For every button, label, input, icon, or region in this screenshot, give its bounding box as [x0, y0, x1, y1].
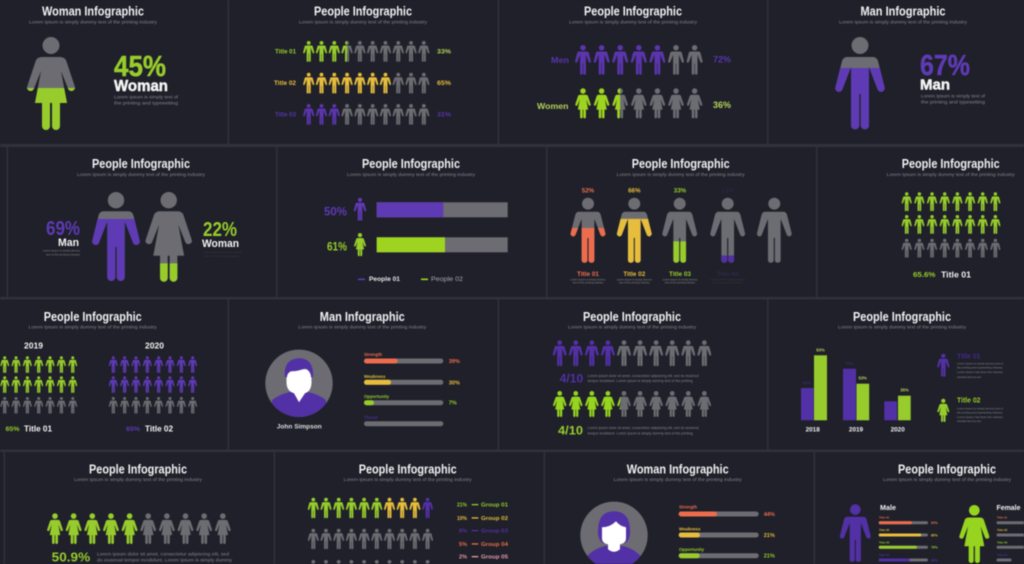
icon: man [937, 354, 949, 377]
skill labels: Weakness [679, 526, 701, 532]
male bars: 63% [931, 558, 938, 562]
panel: male female [840, 462, 1024, 563]
panel: woman profile [580, 462, 775, 564]
skill bars [364, 358, 443, 426]
skill labels: Opportunity [679, 547, 705, 552]
skill labels: Weakness [364, 374, 386, 379]
title: People Infographic [584, 4, 682, 18]
title: People Infographic [362, 157, 460, 171]
bar: people 02 [377, 237, 508, 252]
figure green [662, 198, 697, 263]
text 02 [957, 406, 1003, 423]
bar chart: 53% [859, 376, 867, 380]
subtitle: Lorem Ipsum is simply dummy text of the printing industry [29, 20, 158, 24]
bar chart: 93% [816, 348, 825, 352]
description: Lorem Ipsum is simply text of [921, 94, 986, 98]
title: People Infographic [89, 462, 187, 476]
people row 3 [303, 104, 429, 125]
icon: large woman [27, 37, 75, 130]
woman stat: Woman [202, 238, 239, 250]
subtitle: Lorem Ipsum is simply dummy text of the printing industry [568, 324, 697, 330]
subtitle: Lorem Ipsum is simply dummy text of the printing industry [839, 20, 968, 24]
percentages: 31% [437, 112, 452, 118]
text 01: the printing and typesetting industry. [957, 366, 1003, 370]
panel: 50.9% women [47, 462, 233, 564]
percent labels: 66% [628, 188, 641, 194]
men percentage: 72% [713, 54, 731, 64]
panel: woman infographic 45% [27, 4, 179, 130]
percent labels: 52% [582, 188, 595, 194]
people grid [902, 192, 1000, 258]
figure grey [757, 198, 792, 263]
icon: woman [959, 505, 989, 563]
male bars: 80% [931, 533, 938, 537]
avatar: man [265, 350, 333, 423]
title: People Infographic [853, 310, 951, 324]
captions [570, 278, 746, 284]
year labels [24, 340, 164, 350]
panel: horizontal bars [324, 157, 508, 283]
female bars: Title 03 [997, 540, 1008, 544]
label: Man [920, 76, 950, 94]
skill percents: 39% [449, 359, 460, 365]
percentage: 67% [920, 50, 970, 82]
skill labels: Strength [364, 352, 382, 357]
title 02: Title 02 [957, 396, 980, 404]
man description: text of the printing industry [46, 252, 80, 256]
row labels [274, 50, 297, 118]
panel: man profile [265, 310, 460, 430]
subtitle: Lorem Ipsum is simply dummy text of the printing industry [29, 324, 158, 330]
skill percents: 7% [449, 401, 457, 407]
women row [553, 391, 711, 417]
legend: Group 03 [481, 529, 508, 535]
figure purple [710, 198, 745, 263]
legend: Group 02 [481, 516, 508, 522]
percent labels: 13% [722, 188, 734, 194]
title: People Infographic [359, 462, 457, 476]
title: Man Infographic [860, 4, 946, 18]
stats: Title 01 [24, 424, 53, 434]
grid 2019 [0, 356, 77, 414]
captions: Lorem Ipsum is simply dummy [570, 278, 606, 282]
titles: Title 02 [623, 271, 646, 278]
captions: text of the printing industry [619, 280, 650, 284]
title: People Infographic [632, 157, 730, 171]
male bars: 76% [931, 546, 938, 550]
captions: text of the printing industry [573, 280, 604, 284]
percentages: 65% [437, 80, 452, 87]
icon: woman [937, 399, 949, 422]
legend: People 01 [369, 276, 400, 283]
captions: Lorem Ipsum is simply dummy [662, 278, 698, 282]
men row [575, 45, 703, 75]
woman description: text of the printing industry [204, 254, 239, 258]
captions: text of the printing industry [712, 280, 744, 284]
skill labels: Threat [364, 415, 378, 420]
panel: three people rows [274, 4, 452, 125]
text green [588, 426, 699, 436]
bar chart: 2019 [849, 426, 864, 434]
stat green: 4/10 [558, 423, 583, 437]
title 01: Title 01 [957, 352, 981, 360]
text 02: Lorem Ipsum has been the industry [957, 415, 1003, 419]
year labels: 2020 [145, 340, 164, 350]
percentage: 45% [114, 51, 166, 83]
panel: man and woman comparison [43, 157, 242, 282]
subtitle: Lorem Ipsum is simply dummy text of the printing industry [344, 477, 473, 482]
icon: large man [835, 37, 885, 129]
subtitle: Lorem Ipsum is simply dummy text of the printing industry [617, 172, 746, 177]
man description [43, 248, 80, 256]
subtitle: Lorem Ipsum is simply dummy text of the printing industry [569, 20, 698, 24]
skill labels [364, 352, 390, 420]
women label: Women [537, 101, 568, 111]
percentages: 33% [437, 48, 452, 56]
title: Woman Infographic [42, 4, 144, 18]
male bars: Title 04 [879, 553, 890, 557]
description [114, 94, 179, 106]
stat label: Title 01 [941, 270, 971, 280]
bar chart: 2020 [891, 426, 905, 434]
people row 1 [308, 498, 433, 518]
figure coral [571, 198, 605, 263]
female bars: Title 01 [997, 515, 1008, 519]
male bars: 64% [931, 521, 938, 525]
captions: Lorem Ipsum is simply dummy [617, 278, 653, 282]
people row 2 [303, 73, 429, 94]
description [921, 94, 986, 104]
skill percents [764, 512, 775, 560]
stat purple: 4/10 [560, 372, 584, 386]
men row [553, 340, 711, 366]
panel: five figures [570, 157, 792, 284]
bar chart [801, 348, 911, 434]
bar chart: 35% [900, 388, 909, 392]
titles [577, 271, 739, 278]
skill percents: 44% [764, 512, 775, 518]
stats: Title 02 [145, 424, 174, 434]
subtitle: Lorem Ipsum is simply dummy text of the printing industry [77, 172, 206, 177]
legend: 21% [457, 503, 467, 509]
people row 1 [303, 41, 429, 62]
icon: man [92, 192, 140, 281]
subtitle: Lorem Ipsum is simply dummy text of the printing industry [838, 324, 967, 330]
skill percents: 21% [764, 533, 775, 539]
percentages [437, 48, 452, 118]
panel: men and women [537, 4, 731, 118]
text 01: Lorem Ipsum has been the industry [957, 370, 1003, 374]
panel: bar chart [801, 310, 1003, 434]
text 01 [957, 362, 1003, 379]
text purple: Lorem ipsum dolor sit amet, consectetur adipiscing elit, sed do eiusmod [588, 374, 699, 378]
people row 2 [308, 529, 433, 549]
title: People Infographic [583, 310, 681, 324]
subtitle: Lorem Ipsum is simply dummy text of the printing industry [883, 477, 1012, 482]
skill bars [679, 512, 759, 558]
bar chart: 50% [803, 380, 811, 386]
title: People Infographic [898, 462, 996, 476]
skill labels: Strength [679, 504, 697, 510]
stats [6, 424, 174, 434]
male bars: Title 01 [879, 515, 890, 519]
panel: 4/10 rows [553, 310, 711, 437]
grid 2020 [109, 356, 197, 414]
legend [358, 276, 463, 283]
title: People Infographic [902, 157, 1000, 171]
panel: groups [308, 462, 509, 564]
skill labels: Opportunity [364, 394, 390, 399]
title: People Infographic [314, 4, 412, 18]
percent 61: 61% [327, 240, 347, 254]
subtitle: Lorem Ipsum is simply dummy text of the printing industry [347, 172, 476, 177]
captions: Lorem Ipsum is simply dummy [710, 278, 746, 282]
female heading: Female [996, 503, 1020, 512]
stat: 65.6% [913, 270, 936, 279]
description: Lorem Ipsum is simply text of [114, 94, 179, 100]
man description: Lorem Ipsum is simply dummy [43, 248, 80, 252]
icon: man [354, 198, 366, 221]
icon: woman [146, 192, 192, 282]
title: People Infographic [44, 310, 142, 324]
female bars [996, 515, 1024, 562]
legend: Group 04 [481, 542, 509, 548]
label: Woman [114, 78, 168, 95]
text purple [588, 374, 699, 383]
percent 50: 50% [324, 204, 347, 218]
text [97, 552, 233, 562]
text 02: Lorem Ipsum is simply dummy text of [957, 406, 1003, 410]
man stat [46, 218, 80, 249]
male bars [879, 515, 938, 562]
titles: Title 04 [717, 271, 739, 278]
bar: people 01 [377, 202, 508, 217]
woman description: Lorem Ipsum is simply dummy [204, 250, 242, 254]
bar chart: 2018 [806, 426, 820, 434]
skill percents [449, 359, 460, 407]
text: do eiusmod tempor incididunt. Lorem Ipsum is simply dummy [97, 558, 233, 562]
female bars: Title 04 [997, 553, 1008, 557]
panel: grid 65.6% [887, 157, 1016, 280]
legend: People 02 [431, 276, 463, 283]
male bars: Title 02 [879, 528, 890, 532]
text green: Lorem ipsum dolor sit amet, consectetur adipiscing elit, sed do eiusmod [588, 426, 699, 430]
text: Lorem ipsum dolor sit amet, consectetur adipiscing elit, sed [97, 552, 230, 556]
panel: 2019 vs 2020 [0, 310, 197, 434]
subtitle: Lorem Ipsum is simply dummy text of the printing industry [887, 172, 1016, 177]
legend: Group 05 [481, 555, 508, 561]
description: the printing and typesetting [114, 100, 179, 106]
skill labels [679, 504, 705, 552]
bar chart: 75% [845, 361, 854, 366]
title: People Infographic [92, 157, 190, 171]
panel: man infographic 67% [835, 4, 986, 129]
text green: tempor incididunt. Lorem Ipsum is simply dummy text of the printing [588, 432, 693, 436]
captions: text of the printing industry [665, 280, 696, 284]
subtitle: Lorem Ipsum is simply dummy text of the printing industry [614, 477, 743, 482]
women row [47, 513, 231, 544]
text 01: standard dummy text [957, 375, 981, 379]
woman stat: 22% [203, 219, 237, 241]
skill percents: 21% [764, 554, 775, 560]
percent labels: 33% [674, 188, 687, 194]
woman stat [202, 219, 239, 250]
row labels: Title 02 [274, 81, 297, 87]
row labels: Title 01 [275, 50, 297, 56]
legend: 2% [459, 555, 467, 561]
title: Woman Infographic [627, 462, 729, 476]
man stat: Man [58, 237, 79, 249]
figure yellow [617, 198, 652, 263]
man stat: 69% [46, 218, 80, 240]
avatar: woman [580, 502, 648, 564]
male heading: Male [880, 503, 896, 512]
legend: 8% [459, 529, 467, 535]
women row [575, 88, 702, 118]
titles: Title 03 [669, 271, 691, 278]
row labels: Title 03 [275, 112, 297, 118]
subtitle: Lorem Ipsum is simply dummy text of the printing industry [74, 477, 203, 482]
legend: 5% [459, 542, 467, 548]
year labels: 2019 [24, 340, 43, 350]
people row 3 [308, 560, 433, 564]
stats: 65% [126, 427, 141, 433]
male bars: Title 03 [879, 540, 890, 544]
woman description [204, 250, 242, 258]
text purple: tempor incididunt. Lorem Ipsum is simply dummy text of the printing [588, 379, 693, 383]
text 02: standard dummy text [957, 419, 981, 423]
women percentage: 36% [713, 100, 731, 110]
name: John Simpson [277, 424, 322, 430]
legend [457, 503, 509, 561]
title: Man Infographic [320, 310, 405, 324]
stats: 65% [6, 427, 20, 433]
subtitle: Lorem Ipsum is simply dummy text of the printing industry [299, 20, 428, 24]
titles: Title 01 [577, 271, 599, 278]
female bars: Title 02 [997, 528, 1008, 532]
men label: Men [551, 55, 569, 65]
text 01: Lorem Ipsum is simply dummy text of [957, 362, 1003, 366]
subtitle: Lorem Ipsum is simply dummy text of the printing industry [298, 324, 427, 330]
skill percents: 30% [449, 380, 460, 386]
icon: man [840, 504, 871, 562]
description: the printing and typesetting [921, 100, 986, 104]
legend: 10% [457, 516, 467, 522]
text 02: the printing and typesetting industry. [957, 411, 1003, 415]
legend: Group 01 [481, 503, 508, 509]
icon: woman [354, 233, 366, 256]
percent labels [582, 188, 734, 194]
